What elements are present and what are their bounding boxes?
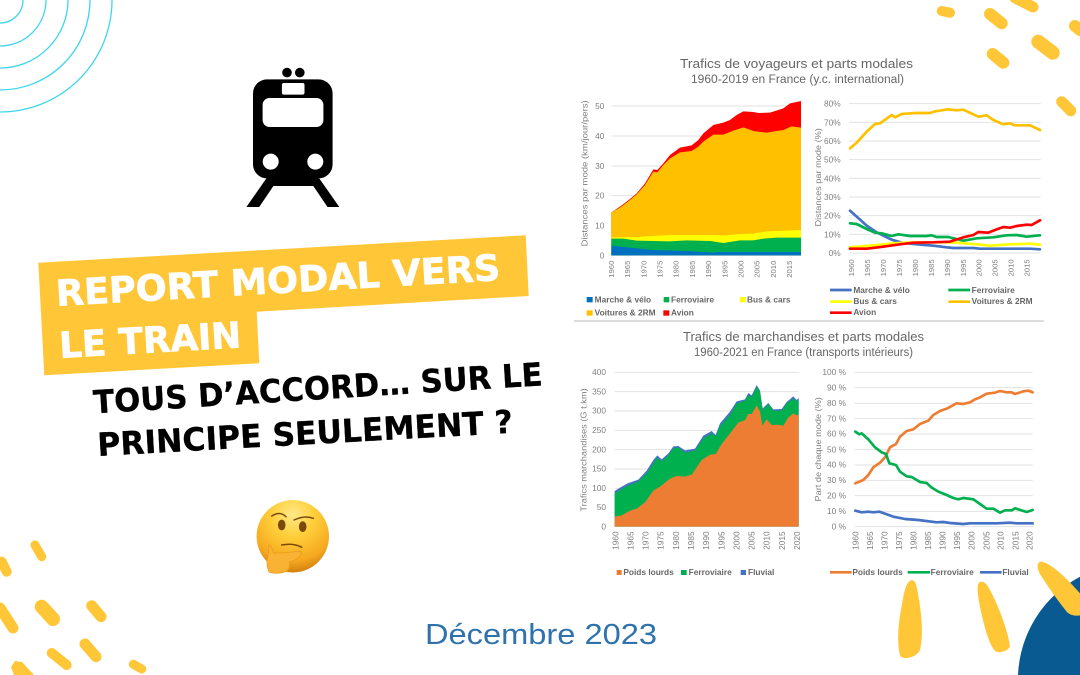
- title banner: [38, 235, 529, 375]
- chart: distances par mode, area: 40: [595, 131, 605, 141]
- chart: part de chaque mode, lines: 2015: [1010, 531, 1020, 550]
- chart: distances par mode, area: 30: [595, 161, 605, 171]
- chart: distances par mode, lines: 60%: [824, 136, 841, 146]
- chart: distances par mode, lines: 70%: [824, 117, 841, 127]
- chart: trafics marchandises, area: Ferroviaire: [689, 567, 732, 577]
- chart: part de chaque mode, lines: 0 %: [832, 521, 847, 531]
- chart: distances par mode, lines: 1990: [943, 259, 952, 276]
- chart: part de chaque mode, lines: 1995: [952, 531, 962, 550]
- chart: trafics marchandises, area: 1990: [701, 531, 711, 550]
- chart: trafics marchandises, area: [579, 367, 802, 577]
- chart: trafics marchandises, area: 2020: [792, 531, 802, 550]
- chart: distances par mode, lines: Voitures & 2RM: [972, 296, 1033, 306]
- chart: trafics marchandises, area: 1985: [686, 531, 696, 550]
- chart: distances par mode, area: 2000: [737, 261, 746, 278]
- chart: distances par mode, area: Marche & vélo: [595, 294, 651, 304]
- subtitle: [92, 355, 544, 464]
- chart: part de chaque mode, lines: 70 %: [827, 413, 847, 423]
- chart: part de chaque mode, lines: [813, 367, 1035, 577]
- chart: trafics marchandises, area: 1960: [610, 531, 620, 550]
- chart: part de chaque mode, lines: Part de chaque mode (%): [813, 397, 823, 501]
- decorative dashes top right: [942, 0, 1080, 111]
- chart: distances par mode, lines: 1975: [895, 259, 904, 276]
- chart: trafics marchandises, area: 2010: [762, 531, 772, 550]
- chart: trafics marchandises, area: 50: [597, 502, 606, 512]
- chart: distances par mode, area: 1960: [607, 261, 616, 278]
- date: Décembre 2023: [425, 619, 657, 651]
- decorative circle and petals bottom right: [898, 562, 1080, 675]
- chart: distances par mode, area: 1980: [672, 261, 681, 278]
- chart: distances par mode, area: Bus & cars: [747, 294, 791, 304]
- chart: trafics marchandises, area: 100: [592, 483, 606, 493]
- chart: trafics marchandises, area: 1975: [656, 531, 666, 550]
- chart: distances par mode, lines: 1960: [847, 259, 856, 276]
- chart: distances par mode, lines: [813, 99, 1041, 317]
- chart: part de chaque mode, lines: Fluvial: [1002, 567, 1029, 577]
- chart: part de chaque mode, lines: 10 %: [827, 506, 847, 516]
- chart: distances par mode, lines: 2005: [991, 259, 1000, 276]
- chart: distances par mode, area: 1985: [688, 261, 697, 278]
- chart: trafics marchandises, area: 2000: [731, 531, 741, 550]
- subtitle: TOUS D’ACCORD… SUR LE: [92, 355, 544, 421]
- icon: train: [246, 68, 339, 207]
- chart: trafics marchandises, area: 350: [592, 386, 606, 396]
- chart: distances par mode, area: Distances par mode (km/jour/pers): [579, 100, 589, 246]
- chart: distances par mode, lines: 50%: [824, 155, 841, 165]
- chart: distances par mode, lines: 2010: [1006, 259, 1015, 276]
- chart: distances par mode, lines: 2000: [975, 259, 984, 276]
- chart: part de chaque mode, lines: 20 %: [827, 490, 847, 500]
- chart: part de chaque mode, lines: Ferroviaire: [931, 567, 974, 577]
- chart: part de chaque mode, lines: 1960: [850, 531, 860, 550]
- chart: part de chaque mode, lines: 1990: [938, 531, 948, 550]
- chart: distances par mode, area: 1970: [639, 261, 648, 278]
- chart: trafics marchandises, area: 1995: [716, 531, 726, 550]
- chart: part de chaque mode, lines: 2000: [967, 531, 977, 550]
- chart: distances par mode, lines: 1985: [927, 259, 936, 276]
- heading: marchandises: Trafics de marchandises et parts modales: [683, 329, 924, 344]
- chart: distances par mode, area: 1995: [720, 261, 729, 278]
- chart: part de chaque mode, lines: 30 %: [827, 475, 847, 485]
- chart: distances par mode, lines: 10%: [824, 229, 841, 239]
- chart: trafics marchandises, area: 1965: [625, 531, 635, 550]
- heading: marchandises: [683, 329, 924, 359]
- chart: distances par mode, area: Voitures & 2RM: [595, 308, 656, 318]
- chart: distances par mode, area: Avion: [671, 308, 694, 318]
- chart: part de chaque mode, lines: 1965: [865, 531, 875, 550]
- chart: trafics marchandises, area: 1970: [641, 531, 651, 550]
- chart: part de chaque mode, lines: 1975: [894, 531, 904, 550]
- chart: part de chaque mode, lines: Poids lourds: [852, 567, 903, 577]
- chart: distances par mode, lines: 1965: [863, 259, 872, 276]
- heading: voyageurs: Trafics de voyageurs et parts modales: [680, 56, 914, 71]
- subtitle: PRINCIPE SEULEMENT ?: [96, 403, 514, 464]
- chart: part de chaque mode, lines: 1985: [923, 531, 933, 550]
- chart: distances par mode, area: 2015: [785, 261, 794, 278]
- decorative concentric rings: [0, 0, 112, 112]
- chart: part de chaque mode, lines: 2005: [981, 531, 991, 550]
- chart: distances par mode, lines: 80%: [824, 99, 841, 109]
- chart: distances par mode, lines: 1980: [911, 259, 920, 276]
- chart: trafics marchandises, area: Trafics marchandises (G t.km): [579, 388, 589, 512]
- icon: thinking face emoji: [257, 500, 329, 573]
- chart: distances par mode, area: 10: [595, 221, 605, 231]
- chart: trafics marchandises, area: 300: [592, 406, 606, 416]
- chart: part de chaque mode, lines: 2010: [996, 531, 1006, 550]
- chart: distances par mode, area: 2010: [769, 261, 778, 278]
- chart: distances par mode, area: [579, 100, 801, 318]
- chart: part de chaque mode, lines: 1970: [879, 531, 889, 550]
- heading: voyageurs: [680, 56, 914, 86]
- chart: trafics marchandises, area: 1980: [671, 531, 681, 550]
- chart: distances par mode, lines: Avion: [853, 307, 876, 317]
- chart: trafics marchandises, area: 0: [601, 521, 606, 531]
- chart: trafics marchandises, area: 150: [592, 464, 606, 474]
- chart: distances par mode, area: 0: [600, 250, 605, 260]
- chart: trafics marchandises, area: Poids lourds: [623, 567, 674, 577]
- chart: distances par mode, area: 1990: [704, 261, 713, 278]
- chart: distances par mode, area: Ferroviaire: [671, 294, 714, 304]
- chart: distances par mode, lines: 2015: [1022, 259, 1031, 276]
- chart: part de chaque mode, lines: 100 %: [822, 367, 847, 377]
- title banner: REPORT MODAL VERS: [55, 248, 501, 315]
- chart: trafics marchandises, area: 2005: [747, 531, 757, 550]
- chart: part de chaque mode, lines: 40 %: [827, 460, 847, 470]
- chart: distances par mode, area: 2005: [753, 261, 762, 278]
- chart: trafics marchandises, area: 2015: [777, 531, 787, 550]
- chart: distances par mode, lines: Bus & cars: [853, 296, 897, 306]
- chart: distances par mode, area: 50: [595, 101, 605, 111]
- chart: trafics marchandises, area: Fluvial: [748, 567, 774, 577]
- chart: distances par mode, lines: 0%: [829, 248, 841, 258]
- chart: distances par mode, lines: Marche & vélo: [853, 285, 910, 295]
- chart: part de chaque mode, lines: 50 %: [827, 444, 847, 454]
- chart: distances par mode, lines: 30%: [824, 192, 841, 202]
- chart: distances par mode, area: 20: [595, 191, 605, 201]
- chart: trafics marchandises, area: 200: [592, 444, 606, 454]
- chart: distances par mode, area: 1975: [656, 261, 665, 278]
- chart: distances par mode, lines: 1995: [959, 259, 968, 276]
- title banner: LE TRAIN: [58, 315, 242, 367]
- chart: part de chaque mode, lines: 1980: [908, 531, 918, 550]
- chart: part de chaque mode, lines: 80 %: [827, 398, 847, 408]
- chart: distances par mode, lines: Distances par mode (%): [813, 128, 823, 226]
- chart: distances par mode, lines: 40%: [824, 173, 841, 183]
- chart: part de chaque mode, lines: 90 %: [827, 382, 847, 392]
- heading: marchandises: 1960-2021 en France (transports intérieurs): [694, 347, 913, 359]
- chart: trafics marchandises, area: 400: [592, 367, 606, 377]
- chart: distances par mode, lines: 20%: [824, 211, 841, 221]
- chart: distances par mode, area: 1965: [623, 261, 632, 278]
- chart: part de chaque mode, lines: 60 %: [827, 429, 847, 439]
- chart: distances par mode, lines: Ferroviaire: [972, 285, 1015, 295]
- divider: [574, 320, 1044, 322]
- chart: part de chaque mode, lines: 2020: [1025, 531, 1035, 550]
- chart: distances par mode, lines: 1970: [879, 259, 888, 276]
- chart: trafics marchandises, area: 250: [592, 425, 606, 435]
- heading: voyageurs: 1960-2019 en France (y.c. international): [691, 74, 904, 86]
- decorative dashes bottom left: [0, 545, 142, 675]
